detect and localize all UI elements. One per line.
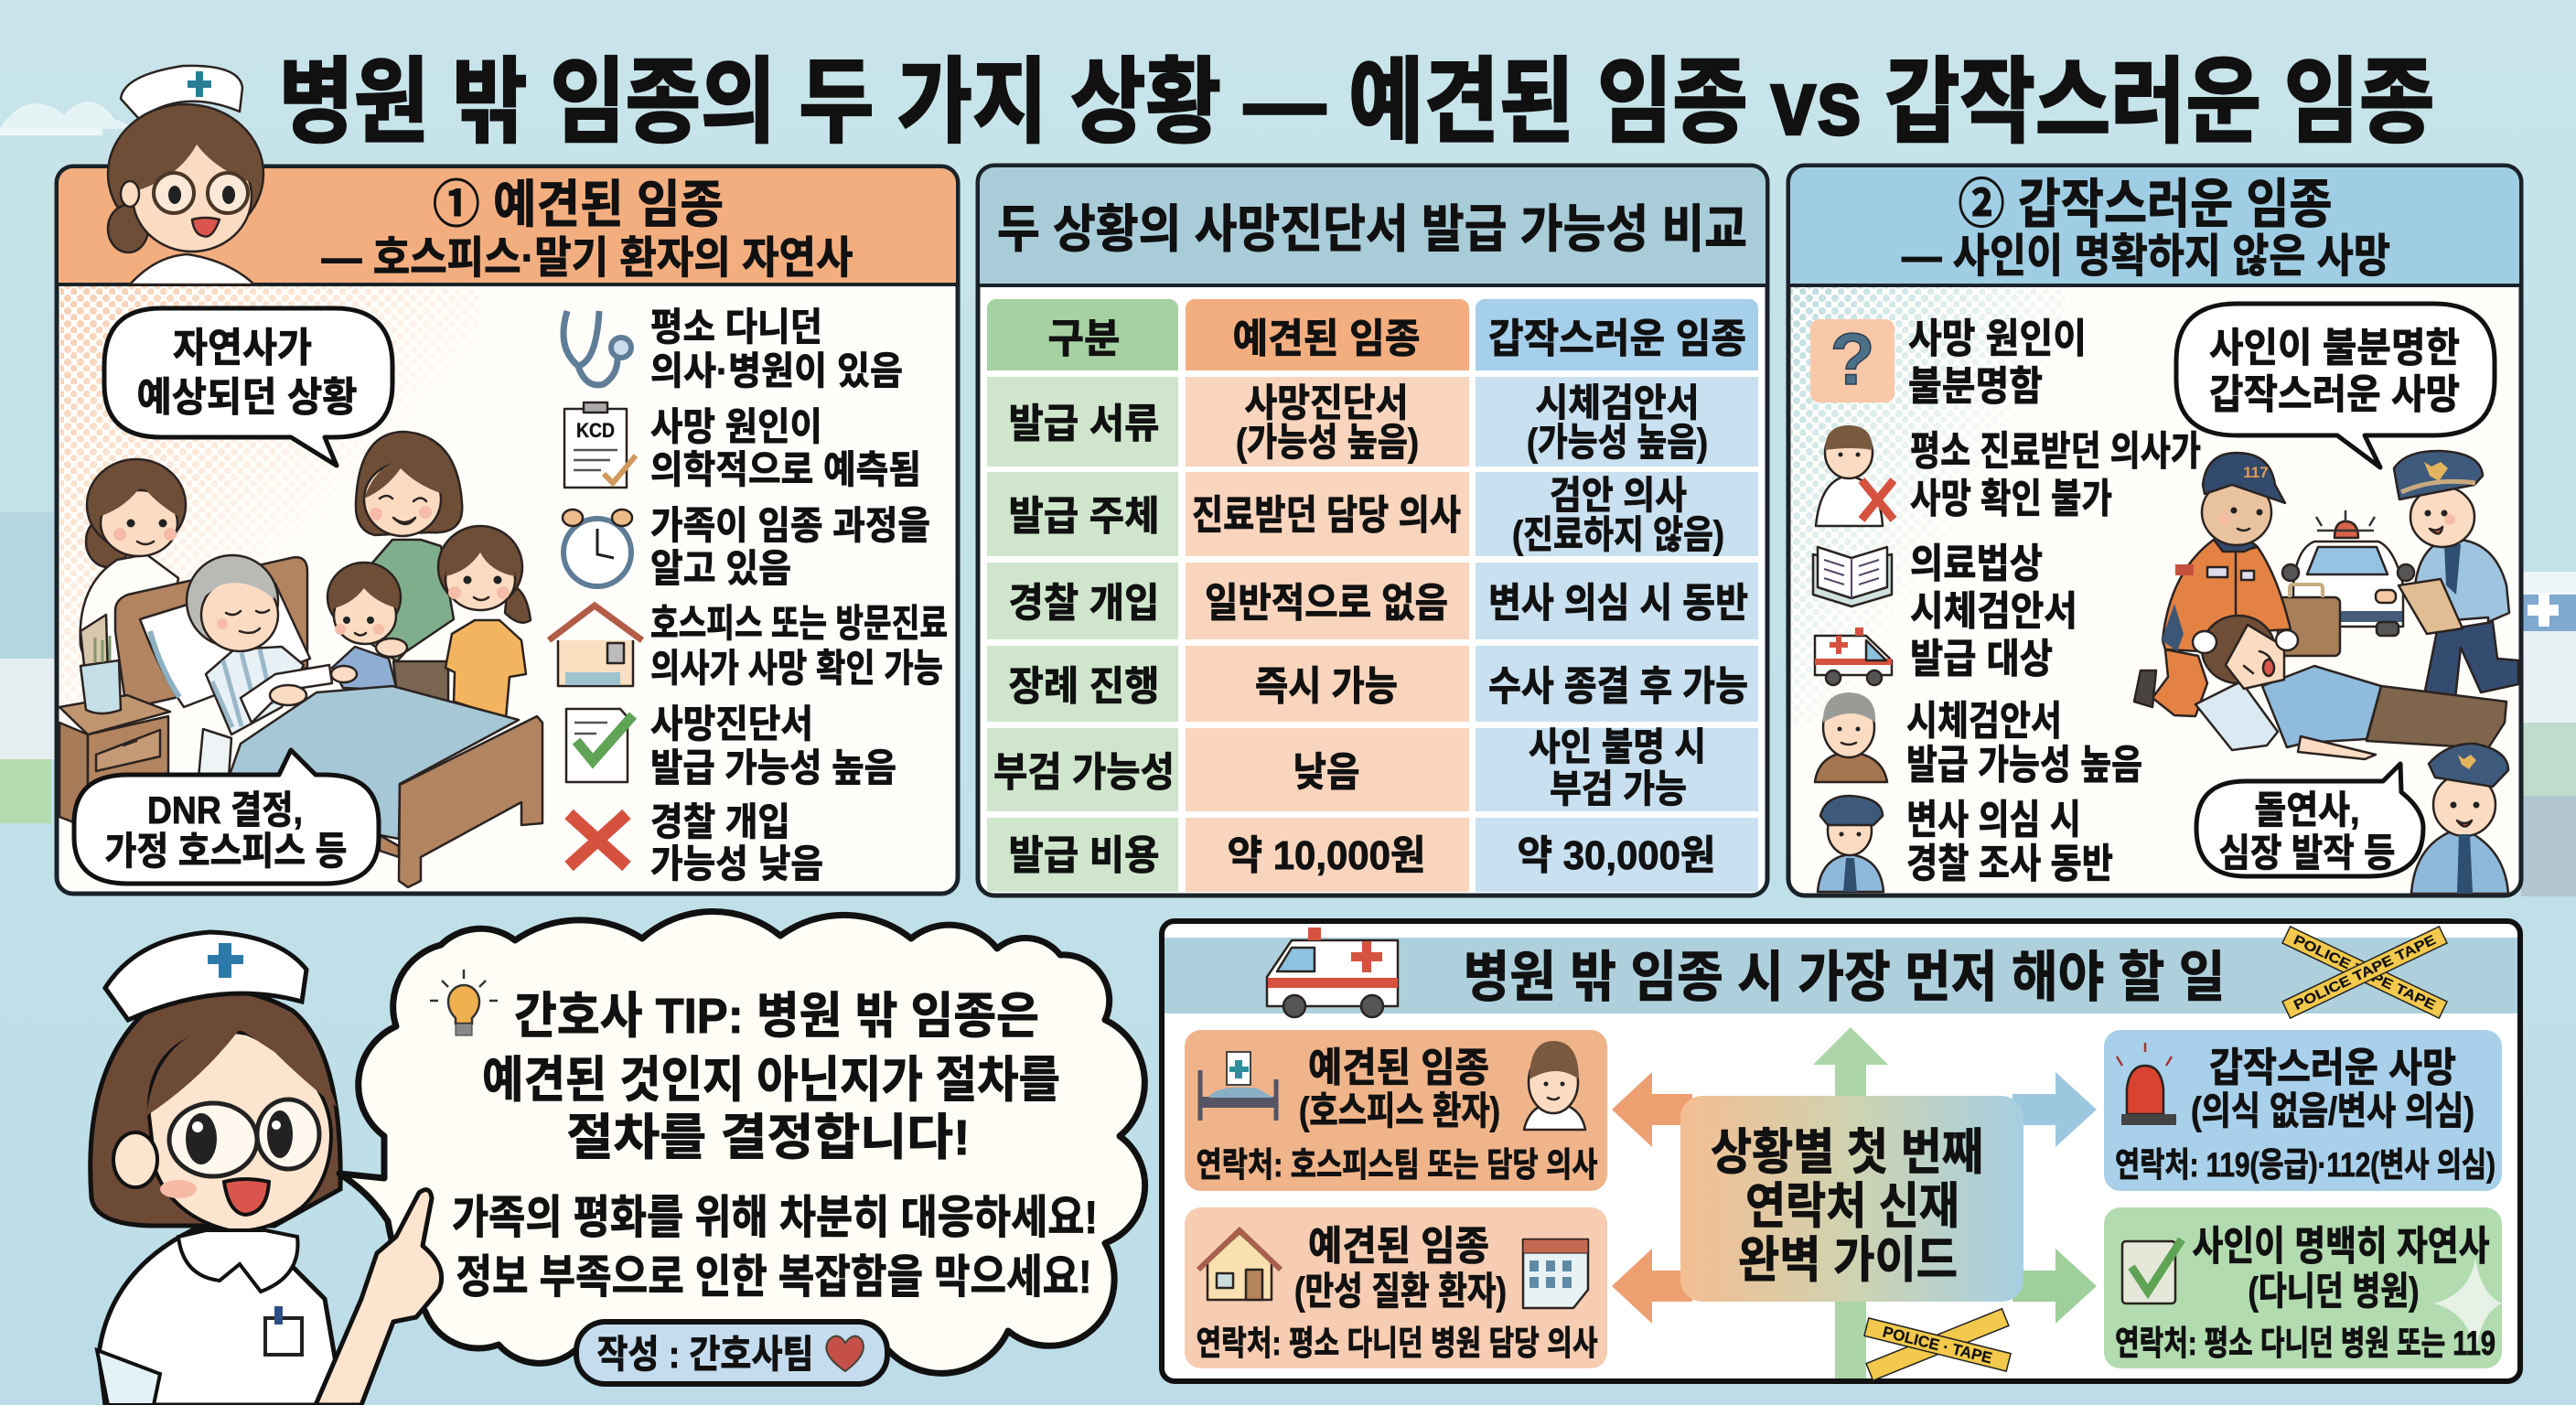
mother xyxy=(356,432,462,704)
icon: question box xyxy=(1810,318,1894,402)
row: police: 변사 의심 시 동반 xyxy=(1488,581,1748,626)
row: issuer: 발급 주체 xyxy=(1008,494,1160,539)
nurse at bedside xyxy=(80,459,186,681)
row: issuer: (진료하지 않음) xyxy=(1512,513,1724,556)
card: chronic patient: 예견된 임종 xyxy=(1308,1224,1489,1269)
nurse uniform xyxy=(99,1230,343,1405)
arrow up xyxy=(1813,1027,1888,1378)
arrow upper left xyxy=(1612,1072,1692,1147)
pillow xyxy=(140,584,310,707)
nurse mascot top xyxy=(108,66,263,284)
panel 1 heading: — 호스피스·말기 환자의 자연사 xyxy=(322,234,853,283)
text: doctor known: 평소 다니던 xyxy=(650,306,822,349)
callout: unclear sudden death: 갑작스러운 사망 xyxy=(2209,372,2460,417)
icon: police tape header: POLICE TAPE TAPE xyxy=(2291,932,2438,1014)
text: certificate likely: 사망진단서 xyxy=(650,702,813,745)
callout: DNR: DNR 결정, xyxy=(147,788,303,831)
icon: old man xyxy=(1815,692,1887,782)
icon: light bulb xyxy=(430,970,498,1035)
text: cause unclear: 사망 원인이 xyxy=(1908,316,2087,361)
sparkle xyxy=(2433,1258,2502,1354)
text: police unlikely: 가능성 낮음 xyxy=(650,842,823,885)
text: family knows: 알고 있음 xyxy=(650,547,791,590)
clipboard xyxy=(2399,579,2463,634)
hat cross xyxy=(208,943,243,978)
table column backgrounds xyxy=(987,299,1758,892)
row: issuer: 검안 의사 xyxy=(1550,474,1687,517)
nurse hat xyxy=(105,932,306,1020)
tip text: 정보 부족으로 인한 복잡함을 막으세요! xyxy=(456,1251,1092,1303)
nurse fringe xyxy=(146,1024,337,1116)
card: hospice patient: (호스피스 환자) xyxy=(1299,1089,1500,1132)
author badge: 작성 : 간호사팀 xyxy=(596,1333,814,1376)
nurse hair back xyxy=(91,990,340,1226)
illustration: emergency scene xyxy=(2134,451,2518,759)
row: document: (가능성 높음) xyxy=(1527,421,1708,464)
card: natural death xyxy=(2104,1207,2502,1368)
panel 3 heading: ② 갑작스러운 임종 xyxy=(1958,175,2333,234)
row: cost xyxy=(1008,833,1716,878)
text: predicted cause: 의학적으로 예측됨 xyxy=(650,448,921,491)
row: autopsy: 부검 가능 xyxy=(1550,767,1687,810)
text: doctor cannot confirm xyxy=(1910,429,2201,521)
panel: expected death xyxy=(57,166,958,894)
text: hospice doctor xyxy=(650,602,948,690)
text: family knows: 가족이 임종 과정을 xyxy=(650,504,930,547)
nightstand xyxy=(59,695,170,828)
panel 1 header band xyxy=(59,168,956,284)
row: issuer xyxy=(1008,474,1724,556)
text: family knows xyxy=(650,504,930,590)
briefcase xyxy=(2278,585,2340,656)
card: hospice patient: 연락처: 호스피스팀 또는 담당 의사 xyxy=(1197,1146,1597,1184)
row: funeral: 수사 종결 후 가능 xyxy=(1488,664,1748,709)
panel 1 heading: ① 예견된 임종 xyxy=(433,176,724,233)
center box: 상황별 첫 번째 xyxy=(1711,1125,1983,1180)
arrow lower right xyxy=(2012,1249,2097,1324)
row: cost: 발급 비용 xyxy=(1008,833,1160,878)
panel: sudden death xyxy=(1788,166,2521,896)
icon: police tape header: POLICE TAPE TAPE xyxy=(2292,932,2439,1014)
ear xyxy=(113,1132,157,1187)
card: sudden death: (의식 없음/변사 의심) xyxy=(2191,1089,2474,1132)
callout: sudden cardiac xyxy=(2196,764,2423,876)
panel 3 heading: — 사인이 명확하지 않은 사망 xyxy=(1902,231,2390,282)
cloud speech bubble xyxy=(339,912,1145,1384)
row: autopsy xyxy=(993,725,1706,810)
text: medical law xyxy=(1910,542,2077,681)
elder patient xyxy=(187,555,304,735)
icon: doctor with x xyxy=(1816,425,1894,526)
icon: red x xyxy=(569,814,627,866)
lying patient xyxy=(2193,616,2506,759)
callout: expected natural death: 자연사가 xyxy=(173,326,312,370)
arrow lower left xyxy=(1612,1249,1692,1324)
row: police: 일반적으로 없음 xyxy=(1205,581,1448,626)
icon: heart xyxy=(826,1336,864,1371)
panel 1 heading xyxy=(322,176,853,283)
icon: document check xyxy=(566,709,633,782)
guide header band xyxy=(1165,938,2517,1014)
table header row: 구분 xyxy=(1048,316,1120,361)
tip text: 절차를 결정합니다! xyxy=(567,1110,970,1165)
row: police: 경찰 개입 xyxy=(1008,581,1160,626)
row: document: 시체검안서 xyxy=(1535,381,1700,424)
card: hospice patient: 예견된 임종 xyxy=(1308,1046,1489,1090)
text: predicted cause xyxy=(650,405,921,491)
card: natural death: 사인이 명백히 자연사 xyxy=(2192,1224,2490,1269)
text: medical law: 의료법상 xyxy=(1910,542,2043,586)
row: document: (가능성 높음) xyxy=(1236,421,1419,464)
text: police investigation: 변사 의심 시 xyxy=(1906,798,2081,842)
text: police investigation: 경찰 조사 동반 xyxy=(1906,842,2113,886)
tip text: 가족의 평화를 위해 차분히 대응하세요! xyxy=(452,1192,1098,1243)
bed footboard xyxy=(380,716,542,887)
row: autopsy: 사인 불명 시 xyxy=(1529,725,1706,768)
pocket xyxy=(265,1318,302,1355)
cup xyxy=(80,636,121,713)
row: police xyxy=(1008,581,1748,626)
icon: small ambulance xyxy=(1815,627,1892,685)
center box: 연락처 신재 xyxy=(1745,1179,1959,1234)
table heading: 두 상황의 사망진단서 발급 가능성 비교 xyxy=(997,200,1747,258)
icon: police tape header xyxy=(2282,927,2447,1018)
glasses xyxy=(169,1099,319,1176)
row: funeral xyxy=(1008,664,1748,709)
arrow upper right xyxy=(2012,1072,2097,1147)
text: medical law: 시체검안서 xyxy=(1910,589,2077,634)
row: funeral: 장례 진행 xyxy=(1008,664,1160,709)
table header row xyxy=(1048,316,1746,361)
text: certificate probable: 시체검안서 xyxy=(1906,699,2062,744)
row: document: 발급 서류 xyxy=(1008,402,1160,446)
callout: DNR: 가정 호스피스 등 xyxy=(104,830,348,873)
panel 2 header band xyxy=(980,167,1766,284)
panel 3 heading xyxy=(1902,175,2390,282)
nurse sleeve xyxy=(97,1350,160,1405)
text: hospice doctor: 의사가 사망 확인 가능 xyxy=(650,647,943,690)
collar xyxy=(178,1230,298,1292)
mouth xyxy=(224,1179,269,1215)
card: chronic patient xyxy=(1185,1207,1607,1368)
guide heading: 병원 밖 임종 시 가장 먼저 해야 할 일 xyxy=(1464,947,2225,1008)
character: large nurse xyxy=(91,932,343,1405)
icon: KCD clipboard xyxy=(564,402,636,488)
callout: DNR xyxy=(74,750,379,884)
tip text: 예견된 것인지 아닌지가 절차를 xyxy=(482,1053,1060,1108)
callout: expected natural death xyxy=(104,308,392,466)
text: medical law: 발급 대상 xyxy=(1910,637,2053,681)
icon: bed xyxy=(1200,1052,1276,1121)
text: police investigation xyxy=(1906,798,2113,886)
row: cost: 약 30,000원 xyxy=(1517,833,1716,878)
text: cause unclear: 불분명함 xyxy=(1908,364,2043,409)
icon: KCD clipboard: KCD xyxy=(576,419,615,442)
police tape center: POLICE · TAPE xyxy=(1881,1323,1994,1367)
center box: 완벽 가이드 xyxy=(1738,1233,1958,1288)
text: doctor known: 의사·병원이 있음 xyxy=(650,349,903,392)
blanket xyxy=(229,686,519,839)
rescuer xyxy=(2134,453,2291,716)
nurse pointing hand xyxy=(316,1190,442,1405)
text: doctor cannot confirm: 평소 진료받던 의사가 xyxy=(1910,429,2201,474)
police officer bottom xyxy=(2411,744,2508,894)
icon: stethoscope xyxy=(564,311,631,385)
author badge xyxy=(576,1322,887,1384)
icon: house small xyxy=(1198,1230,1281,1300)
row: cost: 약 10,000원 xyxy=(1228,833,1425,878)
pen xyxy=(274,1306,283,1325)
text: certificate probable: 발급 가능성 높음 xyxy=(1906,743,2142,788)
row: issuer: 진료받던 담당 의사 xyxy=(1192,493,1461,538)
card: chronic patient: 연락처: 평소 다니던 병원 담당 의사 xyxy=(1197,1325,1597,1362)
icon: police officer xyxy=(1818,796,1884,892)
icon: doctor xyxy=(1524,1041,1585,1130)
card: natural death: (다니던 병원) xyxy=(2249,1270,2419,1313)
row: autopsy: 부검 가능성 xyxy=(993,750,1175,795)
tip text: 간호사 TIP: 병원 밖 임종은 xyxy=(514,989,1039,1044)
police tape center xyxy=(1864,1309,2011,1380)
bed headboard xyxy=(115,557,307,709)
card: chronic patient: (만성 질환 환자) xyxy=(1294,1270,1507,1313)
card: sudden death xyxy=(2104,1030,2502,1191)
text: police unlikely: 경찰 개입 xyxy=(650,800,790,843)
row: autopsy: 낮음 xyxy=(1293,750,1359,795)
table header row: 예견된 임종 xyxy=(1233,316,1420,361)
illustration: family around bed xyxy=(59,432,542,887)
icon: open book xyxy=(1813,547,1892,606)
callout: sudden cardiac: 돌연사, xyxy=(2254,788,2360,831)
text: doctor known xyxy=(650,306,903,392)
callout: expected natural death: 예상되던 상황 xyxy=(137,375,357,420)
icon: calendar xyxy=(1523,1239,1588,1308)
cheeks xyxy=(160,1180,197,1198)
icon: ambulance xyxy=(1267,928,1398,1017)
panel 3 header band xyxy=(1790,167,2519,284)
police officer with clipboard xyxy=(2394,451,2518,699)
girl xyxy=(438,526,531,718)
row: document: 사망진단서 xyxy=(1244,381,1409,424)
panel: comparison table xyxy=(978,166,1767,896)
text: doctor cannot confirm: 사망 확인 불가 xyxy=(1910,477,2112,521)
text: predicted cause: 사망 원인이 xyxy=(650,405,822,448)
row: document xyxy=(1008,381,1708,464)
rescuer: 117 xyxy=(2243,464,2269,481)
text: cause unclear xyxy=(1908,316,2087,409)
panel: first contact guide xyxy=(1162,921,2520,1381)
icon: house xyxy=(549,606,642,686)
callout: unclear sudden death: 사인이 불분명한 xyxy=(2209,326,2460,370)
icon: checkbox xyxy=(2122,1239,2182,1303)
card: hospice patient xyxy=(1185,1030,1607,1191)
callout: unclear sudden death xyxy=(2176,304,2495,467)
table header row: 갑작스러운 임종 xyxy=(1488,316,1746,361)
police car xyxy=(2282,510,2414,636)
nurse face xyxy=(149,1032,331,1231)
text: police unlikely xyxy=(650,800,823,885)
center box xyxy=(1680,1096,2023,1302)
boy xyxy=(327,563,407,691)
text: certificate likely: 발급 가능성 높음 xyxy=(650,746,896,789)
icon: clock xyxy=(563,509,632,586)
tip text xyxy=(452,989,1098,1303)
icon: siren xyxy=(2117,1043,2176,1125)
text: certificate likely xyxy=(650,702,896,789)
row: funeral: 즉시 가능 xyxy=(1255,664,1398,709)
text: certificate probable xyxy=(1906,699,2142,788)
text: hospice doctor: 호스피스 또는 방문진료 xyxy=(650,602,948,645)
callout: sudden cardiac: 심장 발작 등 xyxy=(2219,831,2395,874)
bed sheet xyxy=(199,729,231,778)
icon: question box: ? xyxy=(1830,318,1874,400)
card: sudden death: 갑작스러운 사망 xyxy=(2209,1046,2456,1090)
